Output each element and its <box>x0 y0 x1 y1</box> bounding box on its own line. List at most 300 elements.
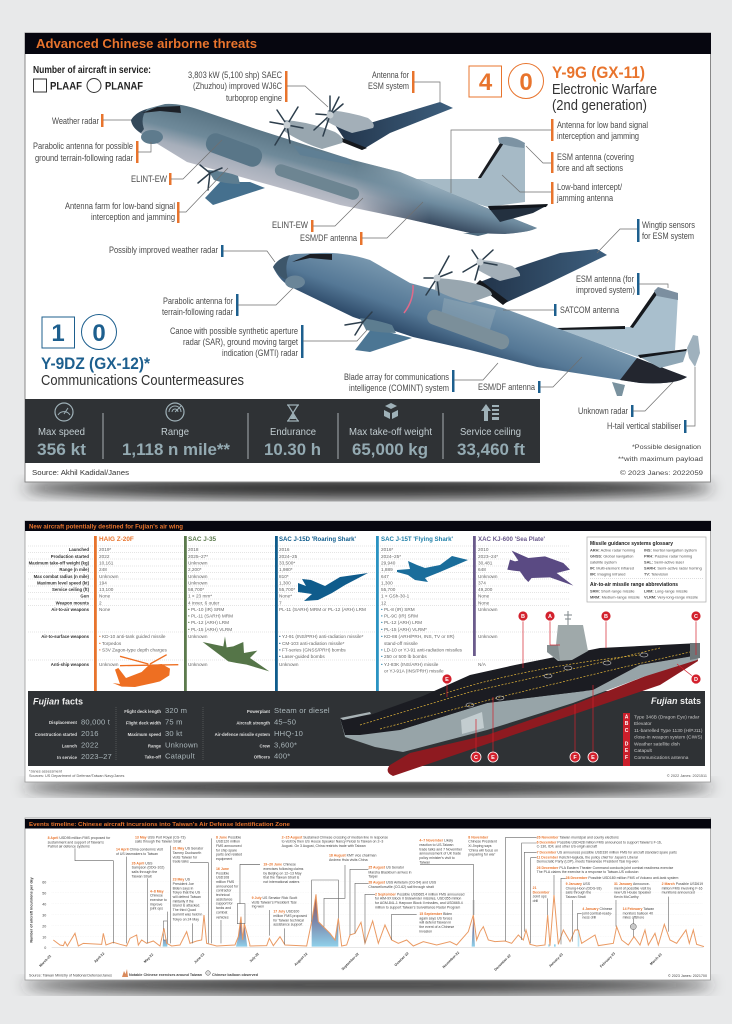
heading: Y-9G count and name <box>469 64 657 114</box>
glossary box: INS: Inertial navigation system <box>644 548 697 552</box>
events: November to March: 21 <box>533 886 537 890</box>
events: March to July: contractor <box>216 889 232 893</box>
copyright: © 2022 Janes: 2021511 <box>667 774 707 778</box>
events: June to November: again says US forces <box>419 916 452 920</box>
column: SAC J-15T: 2016* <box>381 547 393 552</box>
events: June to November: 'China will focus on <box>468 848 498 852</box>
events: June to November: million to support Taiwan's Surveillance Radar Program <box>375 905 460 909</box>
events: June to November: Marsha Blackburn arrives in <box>368 870 412 874</box>
markers: carrier callouts <box>442 611 701 762</box>
callout: ESM/DF antenna: ESM/DF antenna <box>478 381 536 392</box>
events: March to July: equipment <box>216 857 232 861</box>
column: HAIG Z-20F: 2022 <box>99 554 110 559</box>
callout: H-tail stabiliser: H-tail vertical stabiliser <box>607 420 681 431</box>
stat: range: Range <box>161 426 189 438</box>
events: November to March: 11 December Keiichi Hagiuda, the policy chief for Japan's Liberal <box>537 855 638 859</box>
column: HAIG Z-20F: 2019* <box>99 547 111 552</box>
markers: carrier callouts: D <box>694 677 698 683</box>
column: HAIG Z-20F: 10,161 <box>99 560 114 566</box>
callout: canoe: radar (SAR), ground moving target <box>183 336 298 347</box>
column: SAC J-15T: • PL-9C (IR) SRM <box>381 614 418 618</box>
column: HAIG Z-20F: None <box>99 607 111 612</box>
source: Source: Akhil Kadidal/Janes <box>32 470 130 477</box>
events: March to July: technical <box>216 893 230 897</box>
callout: ESM antenna <box>526 146 634 173</box>
events: March to July: parts and related <box>216 853 242 857</box>
Fujian stats key <box>623 713 703 766</box>
events: June to November: trade talks and 7 November <box>419 847 463 851</box>
callout: antenna for ESM system: Antenna for <box>372 69 409 80</box>
events: March to July: 4–8 May <box>150 889 164 893</box>
callout: antenna farm <box>65 168 228 223</box>
Fujian facts table: Powerplant <box>247 709 271 714</box>
column: XAC KJ-600: 49,200 <box>478 587 493 592</box>
events: June to November: Taiwan <box>419 860 430 864</box>
events: March to July: 26 April USS <box>132 861 153 865</box>
stat: service ceiling: 33,460 ft <box>457 440 525 459</box>
silhouette: KJ-600 <box>507 551 573 586</box>
events: June to November: Chancellorsville (CG-62) sail through strait <box>368 885 434 889</box>
column: HAIG Z-20F: • KD-10 anti-tank guided missile <box>99 634 166 639</box>
events: March to July: 8 April USD95 million FMS proposed for <box>48 836 111 840</box>
x axis month labels: February-23 <box>599 951 616 968</box>
events: March to July: sustainment and support of Taiwan's <box>48 840 104 844</box>
Fujian facts table: Flight deck width <box>126 720 161 726</box>
stat: max take-off weight <box>349 403 432 459</box>
events: June to November: 19–20 June Chinese <box>263 863 296 867</box>
heading: Y-9DZ count and name: 0 <box>92 320 106 347</box>
glossary box: satellite system <box>590 560 617 564</box>
icon: Chinese balloon <box>630 924 636 930</box>
column: SAC J-35: Unknown <box>188 560 208 566</box>
events: March to July <box>48 835 260 943</box>
silhouette: helicopter <box>113 655 178 687</box>
events: March to July: 8 June Possible <box>216 835 241 839</box>
callout: canoe <box>170 325 367 358</box>
x axis month labels: August-22 <box>294 952 308 967</box>
column: SAC J-15T: stand-off missile <box>384 641 418 646</box>
events: March to July: 23 May US <box>173 878 191 882</box>
x axis month labels: May-22 <box>143 953 154 964</box>
callout: ESM antenna: fore and aft sections <box>557 162 623 173</box>
glossary box: GNSS: Global navigation <box>590 554 633 558</box>
source line: Source: Taiwan Ministry of National Defense/Janes <box>29 974 112 978</box>
column: SAC J-35: • PL-10 (IR) SRM <box>188 607 224 612</box>
footnotes and sources: Sources: US Department of Defense/Taiwan Navy/Janes <box>29 774 124 778</box>
Fujian facts table: Air-defence missile system <box>215 732 270 737</box>
column: SAC J-35: Unknown <box>188 634 208 639</box>
events: June to November: to visit by then US House Speaker Nancy Pelosi to Taiwan on 2–3 <box>282 840 383 844</box>
events: June to November: 8 November <box>468 835 489 839</box>
column: SAC J-15T: • PL-15 (ARH) VLRM* <box>381 627 427 632</box>
callout: engine: (Zhuzhou) improved WJ6C <box>193 80 282 91</box>
title bar: Advanced Chinese airborne threats <box>36 37 257 51</box>
events: March to July: visits Taiwan for <box>173 855 198 859</box>
events: November to March: December <box>533 890 550 894</box>
stat: max take-off weight: Max take-off weight <box>349 426 432 438</box>
events: June to November: by Beijing on 12–13 May <box>263 871 302 875</box>
events: March to July: FMS announced <box>216 844 242 848</box>
stat: endurance: Endurance <box>270 426 316 438</box>
Fujian facts table: Catapult <box>165 752 196 760</box>
column: HAIG Z-20F: 13,100 <box>99 587 114 592</box>
callout: possibly improved weather radar <box>109 244 275 262</box>
x axis month labels: April-22 <box>93 952 105 964</box>
events: November to March: 31 January Announce- <box>614 882 650 886</box>
events: March to July: assistance <box>216 897 233 901</box>
heading: Y-9G count and name: 4 <box>479 69 493 96</box>
column: SAC J-15T: or YJ-91A (INS/PRH) missile <box>384 668 444 674</box>
glossary box: LRM: Long-range missile <box>644 588 688 594</box>
glossary box: SAL: Semi-active laser <box>644 560 685 564</box>
column: SAC J-15D: 810* <box>279 574 289 579</box>
events: March to July: island is attacked. <box>173 904 200 908</box>
column: SAC J-15T: 1,300 <box>381 580 393 586</box>
events: March to July: 31 May US Senator <box>173 847 204 851</box>
footnotes and sources <box>29 770 124 778</box>
events: March to July: will defend Taiwan <box>173 895 201 899</box>
events: June to November: the event of a Chinese <box>419 925 454 929</box>
events: June to November: Andrew Hsia visits China <box>329 858 368 862</box>
column: SAC J-35: Unknown <box>188 580 208 586</box>
events: June to November: visits Taiwan's President Tsai <box>252 900 297 904</box>
Fujian facts table: Construction started <box>35 732 77 737</box>
events: November to March: 7 December US announces possible USD330 million FMS for aircraft standard spare parts <box>537 850 677 854</box>
aircraft: Y-9DZ illustration <box>273 249 700 396</box>
copyright: © 2023 Janes: 2021700 <box>668 974 707 978</box>
column: SAC J-15D: None* <box>279 594 292 598</box>
footnotes: **with maximum payload <box>618 456 703 463</box>
events: November to March: drill <box>533 899 538 903</box>
events: June to November: for Taiwan technical <box>273 918 304 922</box>
events: November to March: Joint ops <box>533 895 547 899</box>
footnotes <box>618 444 703 477</box>
events: March to July: Tokyo that the US <box>173 891 201 895</box>
y axis and gridlines: 20 <box>42 924 46 928</box>
y axis and gridlines: 40 <box>42 902 46 906</box>
column: HAIG Z-20F: Unknown <box>99 662 119 667</box>
Fujian stats key: B <box>625 721 629 727</box>
column: HAIG Z-20F: 2 <box>99 600 102 606</box>
events: June to November: Ing-wen <box>252 905 264 909</box>
stat: max take-off weight: 65,000 kg <box>352 440 428 459</box>
Fujian facts table: 80,000 t <box>81 718 111 726</box>
callout: wingtip sensors: for ESM system <box>642 230 694 241</box>
column: XAC KJ-600: 30,481 <box>478 560 493 566</box>
aircraft: Y-9G illustration <box>131 96 548 236</box>
stat: max speed: Max speed <box>38 426 85 438</box>
column: SAC J-35: 2025–27* <box>188 554 208 559</box>
column: SAC J-15D: • YJ-91 (INS/PRH) anti-radiation missile* <box>279 634 364 639</box>
events: June to November: for AGM-84L-1 Harpoon Block II missiles, and USD665.4 <box>375 901 463 905</box>
events: June to November: reaction to US-Taiwan <box>419 843 453 847</box>
events: November to March: new US House Speaker <box>614 891 652 895</box>
footnotes and sources: *Janes assessment <box>29 770 63 774</box>
exercise area fills <box>163 894 579 947</box>
events: November to March: sails through the <box>566 891 591 895</box>
events: June to November: will defend Taiwan in <box>419 921 451 925</box>
events: March to July: 13 May USS Port Royal (CG-73) <box>135 835 186 839</box>
Fujian stats key: Weather satellite dish <box>634 742 680 748</box>
callout: blade array <box>344 363 498 393</box>
Fujian facts table: HHQ-10 <box>274 729 303 738</box>
callout: canoe: indication (GMTI) radar <box>222 347 298 358</box>
stat: service ceiling <box>457 404 525 459</box>
column: SAC J-35: SAC J-35 <box>188 536 217 543</box>
stat: range <box>122 403 230 459</box>
glossary box: IR: Multi-element infrared <box>590 566 634 570</box>
events: March to July: million FMS <box>216 880 235 884</box>
events: November to March: Chung-Hoon (DDG-93) <box>566 886 601 890</box>
column: SAC J-35: • PL-12 (ARH) LRM <box>188 620 229 625</box>
callout: ESM/DF antenna <box>300 202 423 245</box>
callout: ELINT-EW forward: ELINT-EW <box>131 173 167 184</box>
glossary box: PRH: Passive radar homing <box>644 554 692 558</box>
stats bar <box>25 399 540 463</box>
column: HAIG Z-20F: 248 <box>99 567 107 572</box>
table: row labels: Max combat radius (n mile) <box>34 574 90 579</box>
callout: unknown radar: Unknown radar <box>578 405 628 416</box>
legend: number of aircraft in service: PLAAF <box>50 80 82 92</box>
events: November to March: 6 December Possible USD428 million FMS announced to support Taiwan's F-16, <box>537 840 662 844</box>
column: SAC J-35: 1 × 23 mm* <box>188 594 212 598</box>
silhouette: J-15T <box>397 556 468 582</box>
callout: parabolic antenna: ground terrain-following radar <box>35 152 133 163</box>
Fujian facts table: Range <box>148 744 162 748</box>
heading: Y-9DZ count and name <box>41 314 244 389</box>
glossary box: SARH: Semi-active radar homing <box>644 566 702 570</box>
Fujian facts table: 30 kt <box>165 729 183 738</box>
y axis and gridlines: 60 <box>42 880 46 884</box>
callout: H-tail stabiliser <box>607 367 695 433</box>
callout: parabolic antenna <box>33 140 151 163</box>
events: March to July: support for <box>216 902 233 906</box>
callout: possibly improved weather radar: Possibly improved weather radar <box>109 244 218 255</box>
markers: carrier callouts: E <box>591 755 595 761</box>
callout: antenna low band: Antenna for low band signal <box>557 119 648 130</box>
callout: antenna low band: interception and jamming <box>557 130 639 141</box>
heading: Y-9DZ count and name: Communications Countermeasures <box>41 373 244 389</box>
column: XAC KJ-600: 2023–24* <box>478 554 498 559</box>
column: SAC J-35: 2,200* <box>188 567 202 572</box>
callout: ELINT-EW forward <box>131 140 222 185</box>
stat: range: 1,118 n mile** <box>122 440 230 459</box>
x axis month labels: March-23 <box>649 952 663 966</box>
heading: Y-9DZ count and name: 1 <box>51 320 65 347</box>
Fujian stats key: Type 346B (Dragon Eye) radar <box>634 714 700 720</box>
events: March to July: 14 April China condemns visit <box>116 848 163 852</box>
events: March to July: Chinese <box>150 894 163 898</box>
legend: number of aircraft in service <box>33 65 151 92</box>
events: March to July: exercise to <box>150 898 167 902</box>
Fujian stats key: F <box>625 755 628 761</box>
heading: Y-9G count and name: (2nd generation) <box>552 98 647 114</box>
column: SAC J-15T: • PL-8 (IR) SRM <box>381 607 415 612</box>
events: June to November: that the Taiwan Strait is <box>263 876 300 880</box>
callout: unknown radar <box>578 382 673 417</box>
column: SAC J-15D: • Laser-guided bombs <box>279 654 325 659</box>
events: June to November: exercises following claims <box>263 867 304 871</box>
callout: antenna farm: Antenna farm for low-band signal <box>65 200 175 211</box>
x axis month labels: December-22 <box>493 953 512 972</box>
events: June to November: 15 September Biden <box>419 912 452 916</box>
table: row labels: Air-to-surface weapons <box>41 634 90 639</box>
events: November to March: ness drill <box>582 916 596 920</box>
stat: endurance <box>264 405 321 459</box>
stat: endurance: 10.30 h <box>264 440 321 459</box>
y axis and gridlines: 50 <box>42 891 46 895</box>
events: March to July: The third Quad <box>173 908 196 912</box>
callout: low-band intercept: Low-band intercept/ <box>557 181 622 192</box>
Fujian facts table: Crew <box>259 744 271 748</box>
Fujian facts table: 2023–27 <box>81 752 112 761</box>
callout: parabolic antenna: terrain-following radar <box>162 306 233 317</box>
events: November to March: Democratic Party (LDP), meets Taiwanese President Tsai Ing-wen <box>537 860 638 864</box>
title bar <box>25 33 711 54</box>
legend: number of aircraft in service: PLANAF <box>105 80 143 92</box>
column: SAC J-35 <box>184 536 269 691</box>
column: SAC J-35: Unknown <box>188 574 208 579</box>
events: June to November: for AIM-9X Block II Sidewinder missiles, USD355 million <box>375 897 461 901</box>
callout: wingtip sensors: Wingtip sensors <box>642 219 695 230</box>
events: June to November: Chinese President <box>468 840 497 844</box>
events: November to March <box>506 835 703 944</box>
callout: parabolic antenna: Parabolic antenna for <box>163 295 233 306</box>
silhouette: J-15D <box>298 573 368 601</box>
column: HAIG Z-20F: 194 <box>99 580 107 586</box>
column: HAIG Z-20F: • S3V Zagon-type depth charges <box>99 648 168 652</box>
callout: antenna low band <box>451 119 648 193</box>
column: SAC J-15D: 33,500* <box>279 560 295 566</box>
heading: Y-9G count and name: 0 <box>519 69 533 96</box>
table: row labels <box>29 547 90 667</box>
events: November to March: miles offshore <box>623 916 644 920</box>
table: row labels: Weapon mounts <box>56 600 90 606</box>
callout: parabolic antenna <box>162 288 293 317</box>
column: SAC J-15T: • KD-88 (ARH/PRH, INS, TV or IIR) <box>381 634 455 639</box>
line chart: daily incursions <box>53 894 704 947</box>
column: SAC J-15D: 7 <box>279 600 282 606</box>
callout: ESM antenna improved <box>576 273 668 295</box>
events: November to March: 26 December PLA Eastern Theater Command conducts joint combat readiness exercise <box>537 866 673 870</box>
callout: blade array: Blade array for communications <box>344 371 449 382</box>
column: SAC J-15T: 2024–25* <box>381 554 401 559</box>
column: XAC KJ-600: Unknown <box>478 634 498 639</box>
callout: ELINT-EW rear: ELINT-EW <box>272 219 308 230</box>
y axis and gridlines: Number of aircraft incursions per day <box>30 876 34 943</box>
column: SAC J-15D: • CM-103 anti-radiation missile* <box>279 641 345 646</box>
Fujian facts table: Officers <box>254 754 271 760</box>
column: XAC KJ-600 <box>473 536 573 667</box>
column: SAC J-15T <box>376 536 468 691</box>
table: row labels: Air-to-air weapons <box>51 607 90 612</box>
table: row labels: Gun <box>80 594 89 598</box>
events: November to March: ment of possible visit by <box>614 886 651 890</box>
column: SAC J-15T: 29,940 <box>381 560 396 566</box>
events: June to November: million FMS proposed <box>273 914 307 918</box>
events: June to November: 2–15 August Sustained Chinese crossing of median line in response <box>282 835 388 839</box>
x axis month labels: November-22 <box>442 951 460 969</box>
events: November to March: 26 November Taiwan municipal and county elections <box>537 835 619 839</box>
events: November to March: million FMS involving F-16 <box>662 886 703 890</box>
Fujian stats key: Communications antenna <box>634 755 689 761</box>
events: March to July: Possible <box>216 871 229 875</box>
callout: ESM antenna improved: ESM antenna (for <box>576 273 634 284</box>
column: SAC J-15T: • LD-10 or YJ-91 anti-radiation missiles <box>381 648 463 652</box>
Fujian stats heading: Fujian stats <box>651 696 701 706</box>
column: XAC KJ-600: Unknown <box>478 607 498 612</box>
Fujian stats key: A <box>625 714 629 720</box>
Fujian stats key: C <box>625 728 629 734</box>
events: November to March: The PLA claims the exercise is a response to Taiwan-US collusion <box>537 870 639 874</box>
title bar <box>25 819 711 828</box>
Fujian stats key: E <box>625 748 629 754</box>
y axis and gridlines: 0 <box>44 946 46 950</box>
events: March to July: Patriot air defence systems <box>48 845 90 849</box>
column: SAC J-15D: 2024–25 <box>279 554 298 559</box>
column: SAC J-15T: • YJ-83K (INS/ARH) missile <box>381 662 439 667</box>
Fujian facts table: Flight deck length <box>124 709 161 714</box>
events: June to November: Xi Jinping says <box>468 844 492 848</box>
silhouette: J-35 <box>203 636 269 671</box>
events: March to July: President Joe <box>173 882 194 886</box>
glossary box: MRM: Medium-range missile <box>590 594 640 600</box>
markers: carrier callouts: A <box>548 614 552 620</box>
column: SAC J-35: Unknown <box>188 662 208 667</box>
column: XAC KJ-600: None <box>478 594 490 598</box>
column: XAC KJ-600: 374 <box>478 580 486 586</box>
column: SAC J-15T: 1,889 <box>381 567 393 572</box>
column: SAC J-15T: • PL-12 (ARH) LRM <box>381 620 422 625</box>
table: row labels: Maximum take-off weight (kg) <box>29 560 90 566</box>
column: SAC J-15D: PL-11 (SARH) MRM or PL-12 (ARH) LRM <box>279 607 366 612</box>
x axis month labels <box>38 951 663 972</box>
column: SAC J-15T: • 250 or 500 lb bombs <box>381 654 427 659</box>
Fujian facts table: 75 m <box>165 718 183 726</box>
table: row labels: Anti-ship weapons <box>51 662 90 667</box>
Fujian stats key: D <box>625 742 629 748</box>
column: SAC J-15T: 55,700 <box>381 587 396 592</box>
events: March to July: Sampson (DDG-102) <box>132 866 164 870</box>
Fujian stats key: close-in weapon system (CIWS) <box>634 734 703 740</box>
Fujian facts table: 45–50 <box>274 718 296 726</box>
callouts: Y-9DZ labels <box>109 219 695 433</box>
Fujian facts heading: Fujian facts <box>33 696 83 706</box>
callout: antenna farm: interception and jamming <box>91 211 175 222</box>
column: XAC KJ-600: 2010 <box>478 547 489 552</box>
callout: canoe: Canoe with possible synthetic aperture <box>170 325 298 336</box>
events: March to July: militarily if the <box>173 899 194 903</box>
heading: Y-9DZ count and name: Y-9DZ (GX-12)* <box>41 355 151 373</box>
legend: number of aircraft in service: Number of aircraft in service: <box>33 65 151 76</box>
events: March to July: announced for <box>216 884 239 888</box>
callout: antenna for ESM system <box>368 69 440 102</box>
Fujian facts table: Unknown <box>165 740 198 750</box>
events: March to July: combat <box>216 910 227 914</box>
table: row labels: Launched <box>69 547 89 552</box>
panel: advanced Chinese airborne threats <box>25 33 711 482</box>
events: June to November: 4–7 November Likely <box>419 839 453 843</box>
footnotes: *Possible designation <box>632 444 701 451</box>
events: June to November: 9 July US Senator Rick Scott <box>252 896 297 900</box>
glossary box: Missile guidance systems glossary <box>590 541 673 547</box>
column: SAC J-35: • PL-15 (ARH) VLRM <box>188 627 232 632</box>
column: XAC KJ-600: Unknown <box>478 574 498 579</box>
callout: ESM antenna improved: improved system) <box>576 284 635 295</box>
Fujian facts table: Take-off <box>145 754 162 760</box>
callout: weather radar: Weather radar <box>52 115 99 126</box>
events: March to July: joint ops <box>149 907 163 911</box>
